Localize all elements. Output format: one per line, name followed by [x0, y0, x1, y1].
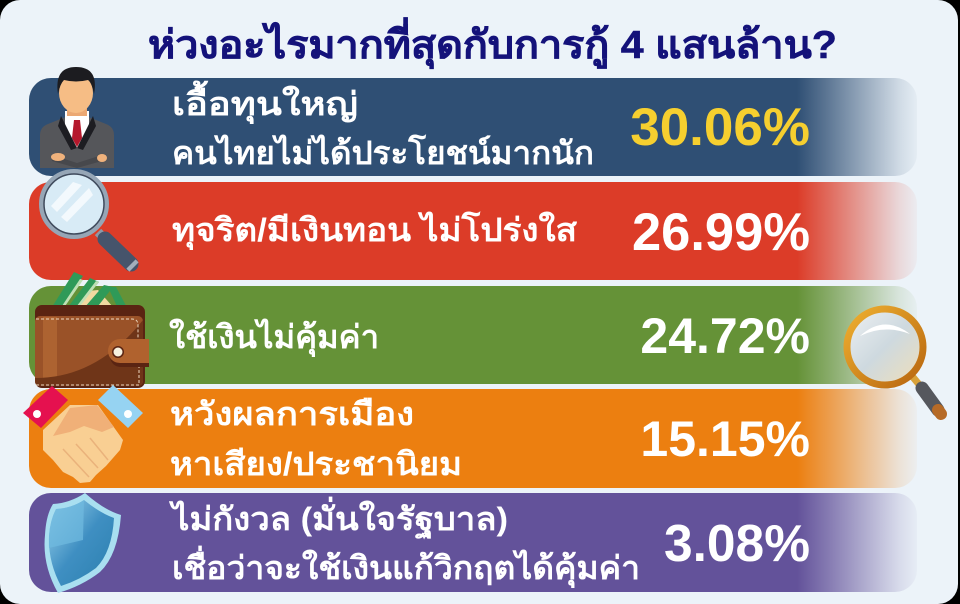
bar 2: [29, 182, 917, 280]
value 4: 15.15%: [640, 411, 810, 467]
value 3: 24.72%: [640, 308, 810, 364]
icon: gold magnifying glass: [847, 309, 941, 414]
bar 1: [29, 78, 917, 176]
value 2: 26.99%: [632, 203, 810, 262]
label 1: คนไทยไม่ได้ประโยชน์มากนัก: [172, 134, 594, 171]
bar 4: [29, 389, 917, 488]
row 3: not worth the money: [29, 286, 917, 384]
bar 5: [29, 493, 917, 592]
label 3: ใช้เงินไม่คุ้มค่า: [169, 318, 379, 358]
label 5: เชื่อว่าจะใช้เงินแก้วิกฤตได้คุ้มค่า: [172, 545, 640, 589]
icon: businessman: [40, 67, 114, 168]
row 4: political gain: [29, 389, 917, 488]
title: ห่วงอะไรมากที่สุดกับการกู้ 4 แสนล้าน?: [148, 17, 837, 69]
label 5: ไม่กังวล (มั่นใจรัฐบาล): [169, 496, 508, 540]
row 2: corruption: [29, 182, 917, 280]
label 4: หาเสียง/ประชานิยม: [170, 446, 462, 482]
label 4: [170, 396, 462, 482]
bar 3: [29, 286, 917, 384]
icon: magnifying glass: [42, 172, 134, 267]
row 1: big business: [29, 78, 917, 176]
label 2: ทุจริต/มีเงินทอน ไม่โปร่งใส: [172, 211, 578, 251]
icon: wallet: [35, 272, 149, 388]
value 5: 3.08%: [664, 514, 810, 572]
label 4: หวังผลการเมือง: [170, 396, 414, 432]
icon: shield: [45, 493, 121, 593]
value 1: 30.06%: [630, 98, 810, 157]
icon: handshake: [23, 385, 143, 483]
row 5: not worried: [29, 493, 917, 592]
label 1: เอื้อทุนใหญ่: [172, 80, 358, 125]
label 1: [172, 80, 594, 171]
label 5: [169, 496, 640, 589]
